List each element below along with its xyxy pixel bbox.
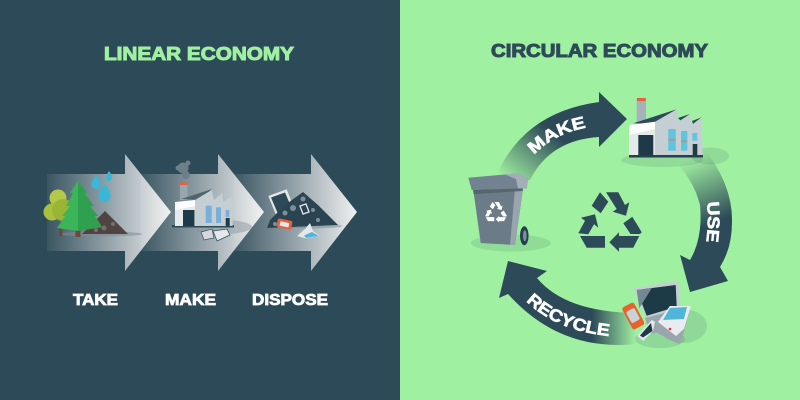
- label: take: TAKE: [73, 292, 118, 309]
- title: circular economy: CIRCULAR ECONOMY: [491, 41, 708, 61]
- title: linear economy: LINEAR ECONOMY: [104, 43, 295, 64]
- arrow: dispose: [233, 154, 357, 271]
- icon: recycle symbol: [578, 192, 642, 252]
- icon: factory with smoke: [172, 160, 252, 241]
- icon: electronics and packaging: [621, 281, 707, 348]
- arrow label: make: MAKE: [526, 116, 586, 154]
- label: make: MAKE: [165, 292, 216, 309]
- arrow: take: [47, 154, 171, 271]
- arrow label: recycle: RECYCLE: [526, 292, 610, 336]
- arrow: make: [497, 92, 627, 180]
- icon: recycling bin: [468, 173, 551, 252]
- arrow: make: [140, 154, 264, 271]
- icon: trees, resource pile and water drops: [44, 171, 142, 237]
- arrow: recycle: [499, 261, 636, 345]
- icon: waste pile: [267, 189, 342, 238]
- panel: linear economy: [0, 0, 400, 400]
- icon: factory: [621, 98, 729, 167]
- arrow label: use: USE: [706, 202, 720, 242]
- panel: circular economy: [468, 41, 732, 348]
- label: dispose: DISPOSE: [252, 292, 328, 309]
- arrow: use: [673, 147, 732, 292]
